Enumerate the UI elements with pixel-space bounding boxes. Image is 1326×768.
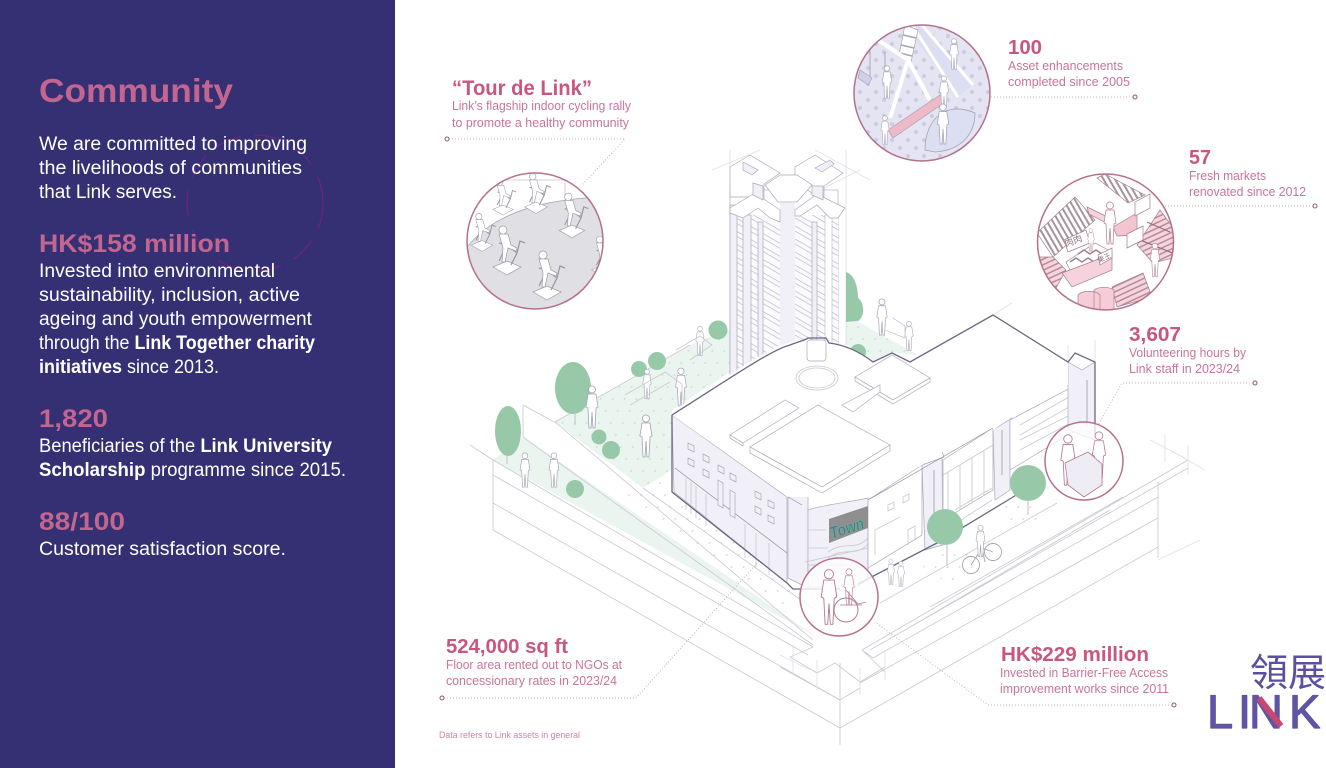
stat: 1,820: 1,820 (39, 405, 108, 433)
roof (672, 315, 1068, 497)
text block: commitment (39, 134, 307, 203)
stat: HK$158 million: initiatives since 2013. (39, 357, 219, 378)
street trees and figures (887, 465, 1046, 587)
callout: 524,000 sq ft (440, 560, 760, 700)
callout: 100 asset enhancements: completed since 2005 (1008, 75, 1130, 89)
text block: commitment: the livelihoods of communities (39, 158, 302, 179)
logo: Link (1207, 642, 1326, 738)
stat: HK$158 million: Invested into environmental (39, 261, 275, 282)
stat: HK$158 million: HK$158 million (39, 230, 230, 258)
illustration: isometric site (470, 150, 1205, 745)
stat: 88/100 (39, 508, 286, 560)
callout: 524,000 sq ft: 524,000 sq ft (446, 636, 568, 658)
callout: Tour de Link: “Tour de Link” (452, 77, 592, 100)
circle: fresh market: 肉肉 (1063, 232, 1084, 249)
callout: 3,607 volunteering hours: Volunteering hours by (1129, 346, 1247, 360)
text block: commitment: that Link serves. (39, 182, 177, 203)
footnote: Data refers to Link assets in general (439, 730, 580, 741)
callout: 3,607 volunteering hours: Link staff in 2023/24 (1129, 362, 1240, 376)
callout: 100 asset enhancements (991, 37, 1137, 99)
callout: HK$229 million: HK$229 million (1001, 644, 1149, 666)
callout: 524,000 sq ft: Floor area rented out to NGOs at (446, 658, 623, 672)
stat: 88/100: 88/100 (39, 508, 125, 536)
circle: volunteers with trolley (1045, 422, 1123, 500)
logo: Link: 領展 (1250, 642, 1326, 697)
callout: 57 fresh markets: Fresh markets (1189, 169, 1266, 183)
callout: Tour de Link: to promote a healthy community (452, 116, 630, 130)
callout: 57 fresh markets: renovated since 2012 (1189, 185, 1306, 199)
circle: fresh market: 果王 (1096, 252, 1113, 265)
circle: indoor cycling rally (466, 172, 604, 310)
stat: HK$158 million: ageing and youth empowerment (39, 309, 313, 330)
stat: HK$158 million: sustainability, inclusion, active (39, 285, 300, 306)
callout: HK$229 million (875, 622, 1176, 707)
people in the park (520, 299, 913, 487)
shopping centre building (672, 315, 1095, 589)
trees and bushes (495, 272, 866, 498)
stat: HK$158 million: through the Link Together charity (39, 333, 315, 354)
callout: 524,000 sq ft: concessionary rates in 2023/24 (446, 674, 617, 688)
callout: Tour de Link (445, 77, 632, 185)
callout: 57 fresh markets: 57 (1189, 147, 1211, 169)
sign: Town: Town (827, 514, 867, 543)
callout: HK$229 million: Invested in Barrier-Free Access (1000, 666, 1168, 680)
stat: 88/100: Customer satisfaction score. (39, 539, 286, 560)
stat: 1,820: Scholarship programme since 2015. (39, 460, 346, 481)
callout: 3,607 volunteering hours (1098, 324, 1257, 425)
stat: HK$158 million (39, 230, 315, 378)
callout: Tour de Link: Link’s flagship indoor cycling rally (452, 99, 632, 113)
callout: 3,607 volunteering hours: 3,607 (1129, 324, 1181, 346)
callout: 57 fresh markets (1165, 147, 1317, 208)
stat: 1,820 (39, 405, 346, 481)
circle: wheelchair access (800, 558, 878, 636)
tower block (730, 155, 845, 375)
logo: Link: LINK (1207, 685, 1320, 738)
heading: Community: Community (39, 72, 234, 109)
panel: community summary (0, 0, 395, 768)
text block: commitment: We are committed to improving (39, 134, 307, 155)
ground: plan lines and pavements (470, 150, 1205, 745)
callout: HK$229 million: improvement works since 2011 (1000, 682, 1169, 696)
circle: fresh market (1034, 174, 1177, 320)
callout: 100 asset enhancements: Asset enhancements (1008, 59, 1123, 73)
stat: 1,820: Beneficiaries of the Link University (39, 436, 332, 457)
callout: 100 asset enhancements: 100 (1008, 37, 1042, 59)
circle: playground (854, 25, 990, 161)
